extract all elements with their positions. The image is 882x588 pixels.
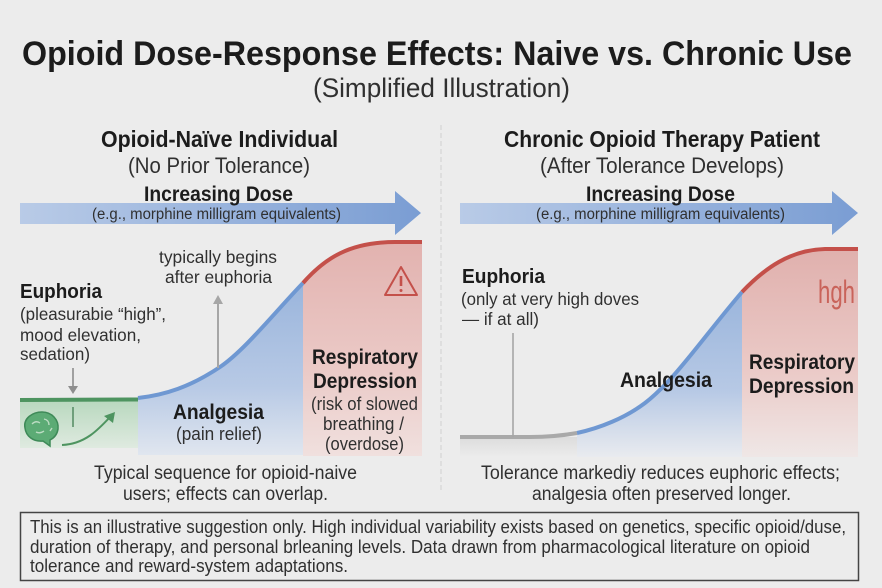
panel heading: Chronic Opioid Therapy Patient: [504, 126, 820, 152]
dose sublabel: (e.g., morphine milligram equivalents): [92, 206, 341, 223]
panel caption: Tolerance markediy reduces euphoric effects;: [481, 463, 840, 484]
panel: chronic opioid therapy patient: [460, 126, 858, 505]
annotation: typically begins after euphoria: [159, 247, 277, 287]
euphoria label: (pleasurabie “high”,: [20, 304, 166, 324]
arrow: down to euphoria: [68, 368, 78, 394]
euphoria label: — if at all): [462, 309, 539, 329]
respiratory depression label: Respiratory: [312, 346, 418, 369]
euphoria label: mood elevation,: [20, 325, 141, 345]
panel caption: [94, 463, 357, 505]
respiratory depression label: [311, 346, 418, 454]
subtitle: (Simplified Illustration): [313, 73, 570, 103]
panel caption: [481, 463, 840, 505]
dose label: Increasing Dose: [144, 183, 293, 206]
analgesia label: (pain relief): [176, 423, 262, 444]
chart: chronic dose-response curve: [460, 249, 858, 457]
panel caption: users; effects can overlap.: [123, 484, 328, 505]
dose label: Increasing Dose: [586, 183, 735, 206]
chart: naive dose-response curve: [20, 242, 422, 456]
dose sublabel: (e.g., morphine milligram equivalents): [536, 206, 785, 223]
icon: brain: [25, 412, 58, 446]
panel subheading: (After Tolerance Develops): [540, 153, 784, 178]
respiratory depression label: Respiratory: [749, 351, 855, 374]
title: Opioid Dose-Response Effects: Naive vs. Chronic Use: [22, 35, 852, 73]
euphoria label: (only at very high doves: [461, 289, 639, 309]
arrow: increasing dose: [20, 191, 421, 235]
respiratory depression label: (risk of slowed: [311, 393, 418, 414]
disclaimer box: This is an illustrative suggestion only. High individual variability exists based on genetics, specific opioid/duse,: [30, 517, 846, 537]
euphoria label: Euphoria: [20, 281, 103, 303]
panel heading: Opioid-Naïve Individual: [101, 126, 338, 152]
euphoria label: Euphoria: [462, 266, 546, 288]
panel: opioid-naive individual: [20, 126, 422, 505]
respiratory depression label: breathing /: [323, 413, 405, 434]
euphoria label: [461, 266, 639, 329]
respiratory depression label: (overdose): [325, 433, 404, 454]
disclaimer box: [20, 512, 858, 580]
annotation: typically begins after euphoria: typically begins: [159, 247, 277, 267]
analgesia label: Analgesia: [173, 401, 264, 424]
panel caption: analgesia often preserved longer.: [532, 484, 791, 505]
analgesia label: Analgesia: [620, 369, 712, 392]
analgesia label: [173, 401, 264, 444]
annotation: typically begins after euphoria: after euphoria: [165, 267, 272, 287]
icon: warning triangle: [385, 267, 417, 295]
respiratory depression label: Depression: [313, 370, 417, 393]
euphoria label: sedation): [20, 344, 90, 364]
euphoria label: [20, 281, 166, 364]
disclaimer box: duration of therapy, and personal brleaning levels. Data drawn from pharmacological literature on opioid: [30, 537, 810, 557]
icon: rising green arrow: [62, 412, 115, 445]
respiratory depression label: [749, 351, 855, 398]
arrow: up annotation: [213, 295, 223, 368]
disclaimer box: tolerance and reward-system adaptations.: [30, 556, 348, 576]
panel caption: Typical sequence for opioid-naive: [94, 463, 357, 484]
panel subheading: (No Prior Tolerance): [128, 153, 310, 178]
arrow: increasing dose: [460, 191, 858, 235]
respiratory depression label: Depression: [749, 375, 854, 398]
red glyph label: hgh: [818, 274, 855, 310]
